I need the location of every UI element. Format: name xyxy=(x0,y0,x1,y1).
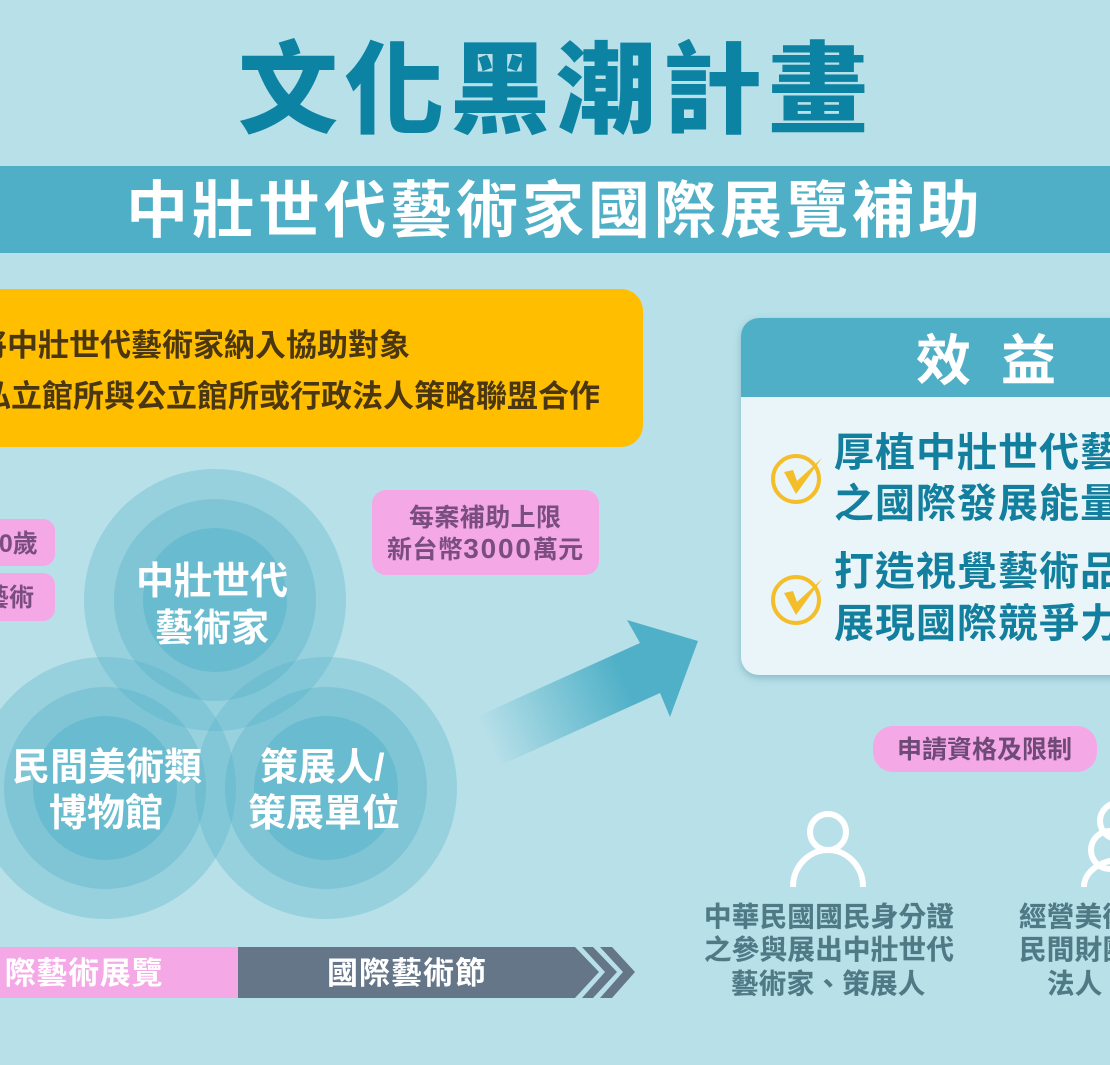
eligibility text 1: 之參與展出中壯世代 xyxy=(704,934,954,965)
label: private museums: 博物館 xyxy=(49,793,163,835)
panel header: 效益 xyxy=(916,330,1086,392)
circle: private museums xyxy=(0,657,236,919)
eligibility text 2: 法人 xyxy=(1047,968,1103,999)
bar: international art exhibition xyxy=(0,947,238,998)
label: curators: 策展人/ xyxy=(260,747,385,789)
circle: curators xyxy=(195,657,457,919)
label: artists: 中壯世代 xyxy=(136,561,288,603)
panel: yellow key points xyxy=(0,289,643,447)
eligibility text 1 xyxy=(704,901,954,999)
bar: international art festival xyxy=(238,947,599,998)
subtitle band xyxy=(0,166,1110,253)
label: artists xyxy=(136,561,288,650)
callout: subsidy cap: 每案補助上限 xyxy=(409,504,561,532)
eligibility text 2 xyxy=(1019,901,1110,999)
eligibility text 1: 中華民國國民身分證 xyxy=(704,901,954,932)
venn diagram xyxy=(0,469,457,919)
icon: group xyxy=(1084,803,1110,887)
benefit 1 xyxy=(834,431,1110,526)
panel: benefits xyxy=(741,318,1110,675)
label: private museums xyxy=(12,747,202,835)
label: private museums: 民間美術類 xyxy=(12,747,202,789)
chevrons xyxy=(582,947,635,998)
icon: check 2 xyxy=(773,577,822,623)
title: 文化黑潮計畫 xyxy=(238,35,874,147)
arrow xyxy=(476,620,698,766)
label: artists: 藝術家 xyxy=(155,608,269,650)
callout: subsidy cap xyxy=(372,490,599,575)
eligibility pill xyxy=(873,726,1097,772)
bar: international art festival: 國際藝術節 xyxy=(327,956,487,991)
callout: age condition xyxy=(0,519,55,566)
benefit 2 xyxy=(834,550,1110,646)
callout: subsidy cap: 新台幣3000萬元 xyxy=(387,533,584,564)
panel body xyxy=(741,318,1110,675)
icon: person xyxy=(793,814,863,887)
label: curators: 策展單位 xyxy=(248,793,400,835)
icon: check 1 xyxy=(773,456,822,502)
label: curators xyxy=(248,747,400,835)
eligibility pill: 申請資格及限制 xyxy=(897,736,1072,764)
subtitle band: 中壯世代藝術家國際展覽補助 xyxy=(126,177,984,246)
panel header xyxy=(741,318,1110,397)
callout: art field xyxy=(0,573,55,621)
eligibility text 1: 藝術家、策展人 xyxy=(731,968,926,999)
circle: artists xyxy=(84,469,346,731)
